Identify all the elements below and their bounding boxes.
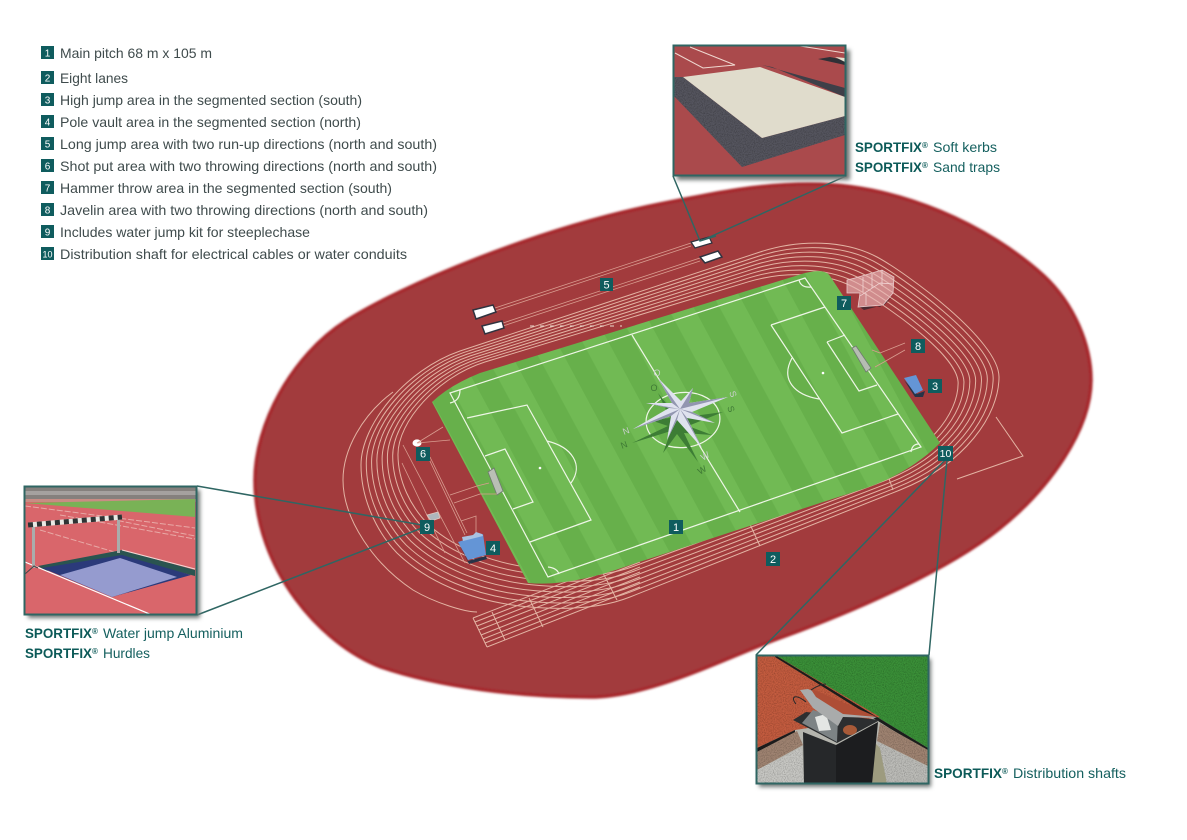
marker 7: 7 <box>841 298 847 310</box>
legend: numbered list: 1 <box>45 48 51 60</box>
caption: water jump and hurdles: SPORTFIX <box>25 625 93 641</box>
caption: soft kerbs and sand traps: ® <box>922 141 928 150</box>
caption: water jump and hurdles <box>25 625 243 661</box>
caption: distribution shafts <box>934 765 1126 781</box>
stadium: red outer surface <box>255 184 1091 697</box>
marker 4: 4 <box>490 543 496 555</box>
caption: soft kerbs and sand traps: Sand traps <box>933 159 1000 175</box>
legend: numbered list: Hammer throw area in the segmented section (south) <box>60 180 392 196</box>
marker 3 <box>928 379 942 393</box>
water jump on track <box>427 512 440 521</box>
legend: numbered list: Eight lanes <box>60 70 128 86</box>
marker 8 <box>911 339 925 353</box>
legend: numbered list: High jump area in the segmented section (south) <box>60 92 362 108</box>
legend: numbered list: 4 <box>45 118 51 128</box>
legend: numbered list <box>41 45 437 262</box>
marker 3: 3 <box>932 381 938 393</box>
long jump area: pits and runways <box>473 237 722 334</box>
caption: soft kerbs and sand traps: SPORTFIX <box>855 139 923 155</box>
connector lines: soft kerbs inset <box>673 176 846 241</box>
marker 6 <box>416 447 430 461</box>
marker 6: 6 <box>420 448 426 460</box>
compass rose: W <box>699 449 712 462</box>
compass rose: S <box>725 404 737 414</box>
caption: distribution shafts: Distribution shafts <box>1013 765 1126 781</box>
hammer throw cage <box>847 270 894 310</box>
marker 9 <box>420 520 434 534</box>
compass rose: N <box>621 425 631 437</box>
javelin runways: north <box>450 483 497 536</box>
compass rose: N <box>619 439 629 451</box>
inset: water jump and hurdle <box>24 486 200 618</box>
compass rose: O <box>653 368 661 378</box>
marker 2: 2 <box>770 554 776 566</box>
caption: water jump and hurdles: ® <box>92 627 98 636</box>
marker 2 <box>766 552 780 566</box>
legend: numbered list: 2 <box>45 74 51 84</box>
javelin runways: south <box>872 343 905 367</box>
marker 10: 10 <box>940 448 951 460</box>
inset: sand trap and soft kerbs <box>673 46 850 180</box>
legend: numbered list: Includes water jump kit for steeplechase <box>60 224 310 240</box>
connector lines: distribution shaft inset <box>756 460 947 655</box>
football pitch <box>432 271 940 584</box>
running track: eight lanes <box>343 243 1023 647</box>
goal: north <box>488 468 503 495</box>
marker 5: 5 <box>603 280 610 292</box>
legend: numbered list: 3 <box>45 96 51 106</box>
legend: numbered list: 8 <box>45 206 51 216</box>
caption: soft kerbs and sand traps: ® <box>922 161 928 170</box>
caption: water jump and hurdles: SPORTFIX <box>25 645 93 661</box>
marker 9: 9 <box>424 522 430 534</box>
compass shadow <box>632 393 723 462</box>
legend: numbered list: 9 <box>45 228 51 238</box>
compass rose: S <box>727 389 739 399</box>
legend: numbered list: Distribution shaft for electrical cables or water conduits <box>60 246 407 262</box>
marker 1 <box>669 520 683 534</box>
compass rose: W <box>696 463 709 476</box>
pole vault mat <box>458 532 487 564</box>
compass rose: O <box>650 383 658 393</box>
legend: numbered list: Shot put area with two throwing directions (north and south) <box>60 158 437 174</box>
legend: numbered list: 5 <box>45 140 51 150</box>
marker 5 <box>600 278 613 292</box>
inset: distribution shaft <box>756 655 931 787</box>
legend: numbered list: Main pitch 68 m x 105 m <box>60 45 212 61</box>
high jump mat <box>904 375 925 397</box>
legend: numbered list: Javelin area with two throwing directions (north and south) <box>60 202 428 218</box>
marker 8: 8 <box>915 341 921 353</box>
pitch markings <box>450 278 921 577</box>
legend: numbered list: Long jump area with two run-up directions (north and south) <box>60 136 437 152</box>
caption: distribution shafts: ® <box>1002 767 1008 776</box>
marker 1: 1 <box>673 522 679 534</box>
compass rose <box>619 368 739 476</box>
caption: water jump and hurdles: Water jump Aluminium <box>103 625 243 641</box>
legend: numbered list: Pole vault area in the segmented section (north) <box>60 114 361 130</box>
connector lines: water jump inset <box>197 486 422 615</box>
caption: soft kerbs and sand traps <box>855 139 1000 175</box>
caption: water jump and hurdles: Hurdles <box>103 645 150 661</box>
caption: soft kerbs and sand traps: SPORTFIX <box>855 159 923 175</box>
legend: numbered list: 6 <box>45 162 51 172</box>
marker 7 <box>837 296 851 310</box>
legend: numbered list: 7 <box>45 184 51 194</box>
marker 10 <box>938 446 953 461</box>
caption: water jump and hurdles: ® <box>92 647 98 656</box>
legend: numbered list: 10 <box>42 250 52 260</box>
caption: soft kerbs and sand traps: Soft kerbs <box>933 139 997 155</box>
marker 4 <box>486 541 500 555</box>
caption: distribution shafts: SPORTFIX <box>934 765 1003 781</box>
shot put circle and lines <box>402 427 467 563</box>
goal: south <box>852 346 871 372</box>
compass star <box>633 378 728 448</box>
